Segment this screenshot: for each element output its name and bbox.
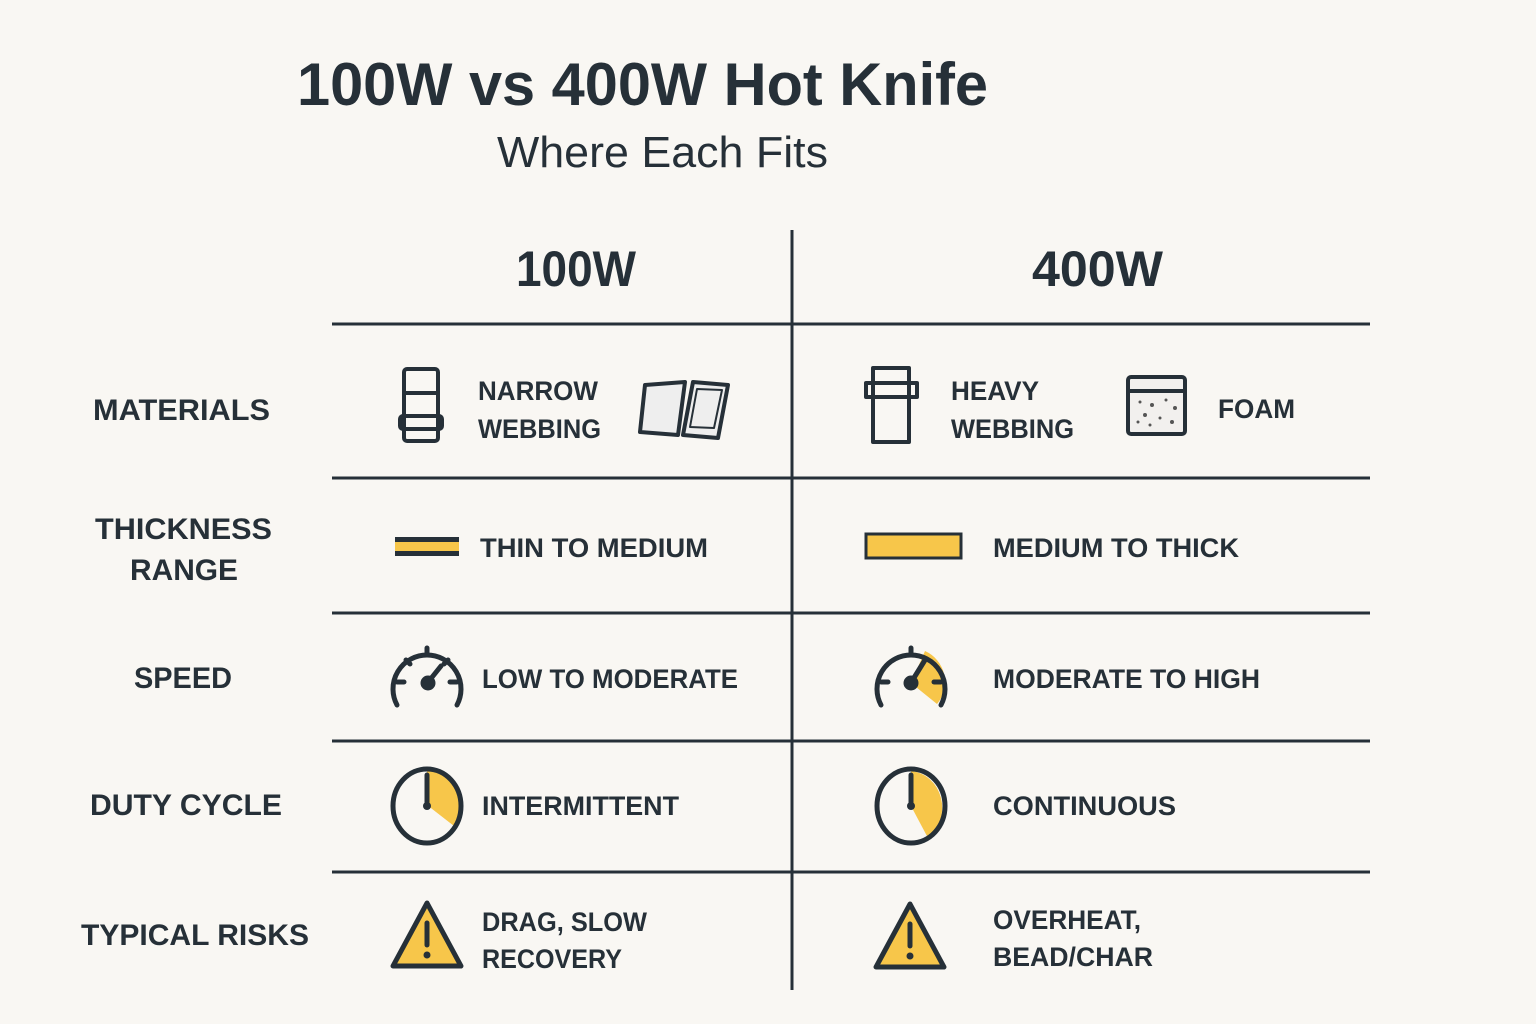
row labels: DUTY CYCLE [90,789,282,822]
icon: clock continuous [877,769,945,843]
cell texts: BEAD/CHAR [993,942,1153,972]
icon: thick bar [866,534,961,558]
cell texts: LOW TO MODERATE [482,664,738,694]
icon: foam block [1128,377,1185,434]
cell texts [478,376,1295,974]
title: 100W vs 400W Hot Knife [297,51,988,118]
cell texts: THIN TO MEDIUM [480,533,708,563]
icon: gauge high [877,648,945,705]
row labels [81,394,309,952]
icon: narrow webbing [400,369,442,441]
cell texts: WEBBING [478,414,601,444]
cell texts: RECOVERY [482,944,622,974]
table grid [332,230,1370,990]
row labels: THICKNESS [95,513,272,546]
cell texts: HEAVY [951,376,1039,406]
icon: warning left [393,903,461,966]
row labels: MATERIALS [93,394,270,427]
icon: heavy webbing [866,368,917,442]
cell texts: CONTINUOUS [993,791,1176,821]
subtitle: Where Each Fits [497,128,828,177]
cell texts: OVERHEAT, [993,905,1141,935]
icon: thin bar [395,537,459,556]
icon: gauge low [393,648,461,705]
cell texts: INTERMITTENT [482,791,679,821]
cell texts: MODERATE TO HIGH [993,664,1260,694]
cell texts: MEDIUM TO THICK [993,533,1239,563]
cell texts: FOAM [1218,394,1295,424]
column header: 100W: 100W [516,241,637,297]
cell texts: WEBBING [951,414,1074,444]
icon: warning right [876,904,944,967]
row labels: RANGE [130,554,238,587]
icon: clock intermittent [393,769,461,843]
cell texts: NARROW [478,376,598,406]
icon: foam pieces [640,382,728,438]
row labels: SPEED [134,662,232,695]
column header: 400W: 400W [1032,241,1164,297]
cell texts: DRAG, SLOW [482,907,647,937]
row labels: TYPICAL RISKS [81,919,309,952]
